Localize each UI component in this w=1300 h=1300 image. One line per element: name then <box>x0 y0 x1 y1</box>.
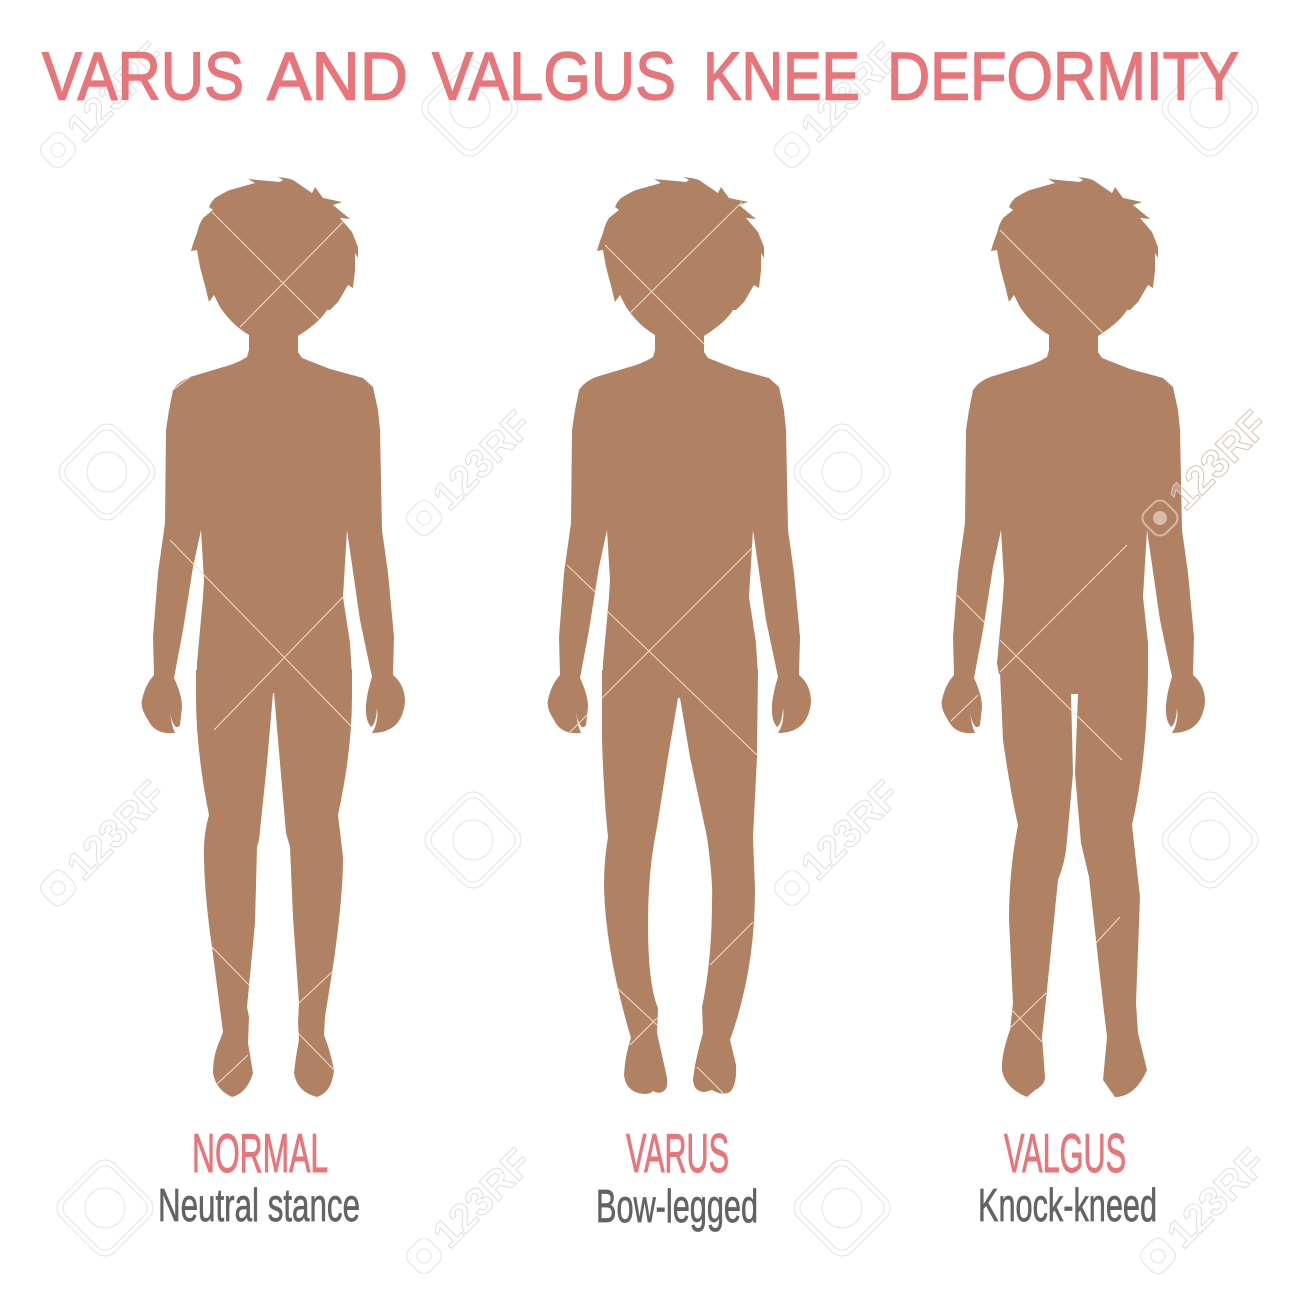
watermark pattern: 123RF <box>59 773 175 889</box>
title: DEFORMITY <box>887 38 1239 114</box>
watermark pattern: 123RF <box>59 35 175 151</box>
label: valgus <box>978 1122 1157 1231</box>
label: normal <box>158 1122 360 1231</box>
watermark pattern: 123RF <box>793 773 909 889</box>
figure: valgus knock-kneed silhouette <box>942 177 1205 1097</box>
title: VALGUS <box>432 38 676 114</box>
watermark stamp overlapping valgus arm: 123RF <box>1161 403 1277 519</box>
watermark pattern: 123RF <box>425 403 541 519</box>
watermark pattern: 123RF <box>793 35 909 151</box>
label: varus: VARUS <box>626 1122 729 1184</box>
title <box>42 38 1239 114</box>
watermark hairlines over figures <box>170 202 1127 1093</box>
figure: normal stance silhouette <box>142 177 405 1097</box>
label: valgus: VALGUS <box>1004 1122 1126 1184</box>
label: varus <box>596 1122 758 1232</box>
watermark pattern: 123RF <box>425 1141 541 1257</box>
title: AND <box>267 38 408 114</box>
watermark stamp overlapping valgus arm <box>1135 403 1277 545</box>
watermark pattern: 123RF <box>1159 1141 1275 1257</box>
label: valgus: Knock-kneed <box>978 1179 1157 1231</box>
label: varus: Bow-legged <box>596 1180 758 1232</box>
label: normal: NORMAL <box>192 1122 328 1184</box>
label: normal: Neutral stance <box>158 1179 360 1231</box>
title: KNEE <box>703 38 860 114</box>
figure: varus bow-legged silhouette <box>548 177 811 1094</box>
title: VARUS <box>42 38 244 114</box>
